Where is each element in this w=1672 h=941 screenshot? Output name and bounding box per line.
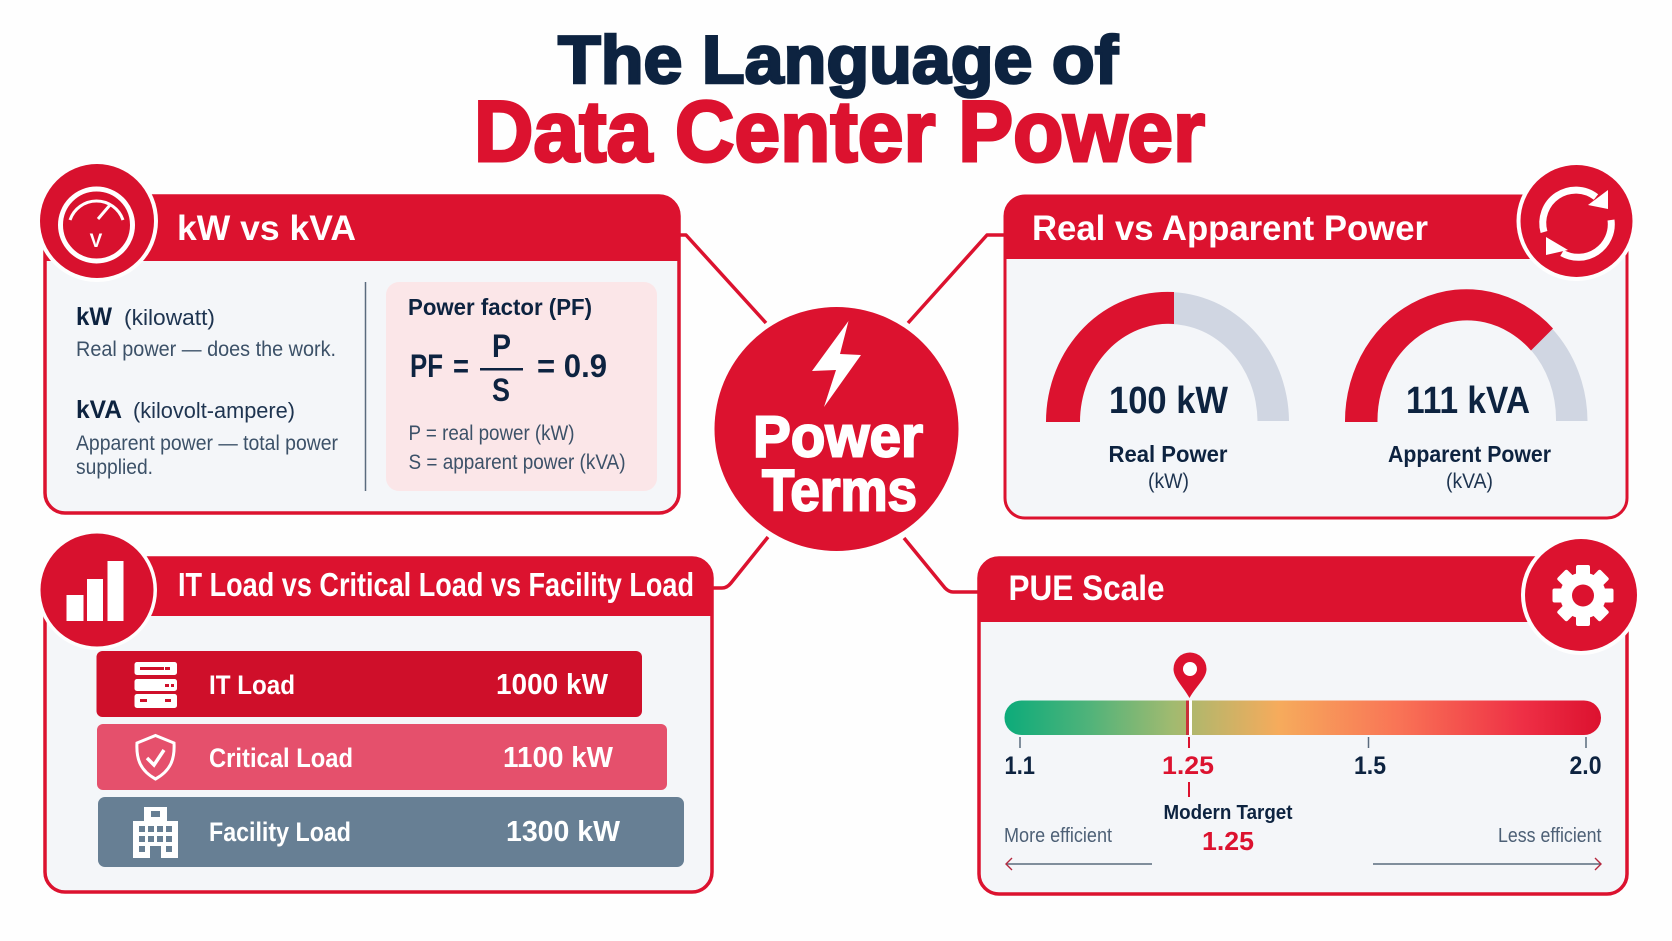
scale labels: 1.1 xyxy=(1004,752,1035,780)
bar: Critical Load xyxy=(97,724,667,790)
scale labels xyxy=(1004,752,1602,780)
icon: gauge badge xyxy=(36,160,158,282)
direction labels: More efficient xyxy=(1004,825,1112,847)
arrow: less efficient xyxy=(1373,858,1601,870)
bar value: 1000 kW xyxy=(496,669,609,701)
panel header xyxy=(978,557,1600,622)
hub label: Power xyxy=(753,404,923,470)
kW definition: Real power — does the work. xyxy=(76,338,336,361)
kW definition: (kilowatt) xyxy=(124,305,215,330)
gauge: real power xyxy=(1046,292,1289,493)
icon: refresh badge xyxy=(1516,161,1636,281)
icon: building xyxy=(133,807,178,858)
icon: shield xyxy=(137,736,174,779)
icon: bar chart badge xyxy=(37,530,157,650)
kW definition xyxy=(76,303,336,361)
direction labels xyxy=(1004,825,1602,847)
gauge value: 111 kVA xyxy=(1406,380,1530,422)
gauge label: Real Power xyxy=(1108,441,1228,467)
bar: Facility Load xyxy=(98,797,684,867)
title line 2: Data Center Power xyxy=(474,84,1205,180)
bar label: Facility Load xyxy=(209,817,351,847)
panel header xyxy=(45,557,713,616)
icon: gear badge xyxy=(1521,535,1641,655)
scale labels: 1.25 xyxy=(1162,752,1214,780)
icon: target pin xyxy=(1174,652,1206,698)
icon: gauge badge: V xyxy=(90,231,103,252)
modern target callout xyxy=(1164,802,1293,856)
hub label: Terms xyxy=(762,458,917,524)
formula legend xyxy=(408,422,626,474)
kW definition: kW xyxy=(76,303,112,331)
bar label: Critical Load xyxy=(209,743,353,773)
panel heading: Real vs Apparent Power xyxy=(1032,209,1428,248)
gauge label xyxy=(1108,441,1228,493)
kVA definition: Apparent power — total power xyxy=(76,432,338,455)
power factor box xyxy=(386,282,657,491)
bar value: 1100 kW xyxy=(503,742,614,774)
icon: lightning bolt xyxy=(812,321,861,407)
connector lines xyxy=(678,235,1006,592)
panel heading: IT Load vs Critical Load vs Facility Load xyxy=(178,566,694,603)
title line 1: The Language of xyxy=(558,22,1118,98)
title xyxy=(474,22,1205,180)
formula legend: P = real power (kW) xyxy=(408,422,574,445)
power factor formula: PF xyxy=(410,348,443,384)
panel header xyxy=(1004,195,1600,259)
bar label: IT Load xyxy=(209,670,295,700)
gauge label: (kW) xyxy=(1148,470,1189,493)
gauge label: (kVA) xyxy=(1446,470,1493,493)
panel heading: kW vs kVA xyxy=(177,209,356,248)
modern target callout: Modern Target xyxy=(1164,802,1293,824)
formula legend: S = apparent power (kVA) xyxy=(408,451,626,474)
gauge: apparent power xyxy=(1345,289,1588,493)
scale labels: 2.0 xyxy=(1570,752,1602,780)
panel: Real vs Apparent Power xyxy=(1004,161,1636,518)
kVA definition: supplied. xyxy=(76,456,153,479)
kVA definition: (kilovolt-ampere) xyxy=(133,398,295,423)
gauge label: Apparent Power xyxy=(1388,441,1551,467)
power factor formula: = 0.9 xyxy=(537,348,607,384)
power factor formula: S xyxy=(492,372,510,408)
power factor formula: = xyxy=(453,348,469,384)
scale ticks xyxy=(1020,737,1586,797)
kVA definition: kVA xyxy=(76,396,122,424)
PUE gradient scale xyxy=(1004,700,1601,735)
bar: IT Load xyxy=(96,651,642,717)
central hub: Power Terms xyxy=(714,307,958,551)
arrow: more efficient xyxy=(1006,858,1152,870)
direction labels: Less efficient xyxy=(1498,825,1602,847)
hub label xyxy=(753,404,923,524)
panel: PUE Scale xyxy=(978,535,1641,894)
scale labels: 1.5 xyxy=(1354,752,1386,780)
power factor formula: P xyxy=(492,328,511,364)
gauge label xyxy=(1388,441,1551,493)
power factor heading: Power factor (PF) xyxy=(408,294,592,320)
panel: load comparison xyxy=(37,530,713,892)
icon: server xyxy=(134,662,177,708)
panel header xyxy=(45,195,680,261)
gauge value: 100 kW xyxy=(1109,380,1228,422)
panel heading: PUE Scale xyxy=(1008,569,1164,608)
panel: kW vs kVA xyxy=(36,160,680,513)
modern target callout: 1.25 xyxy=(1202,826,1254,856)
bar value: 1300 kW xyxy=(506,816,621,848)
kVA definition xyxy=(76,396,338,479)
power factor formula xyxy=(410,328,607,408)
